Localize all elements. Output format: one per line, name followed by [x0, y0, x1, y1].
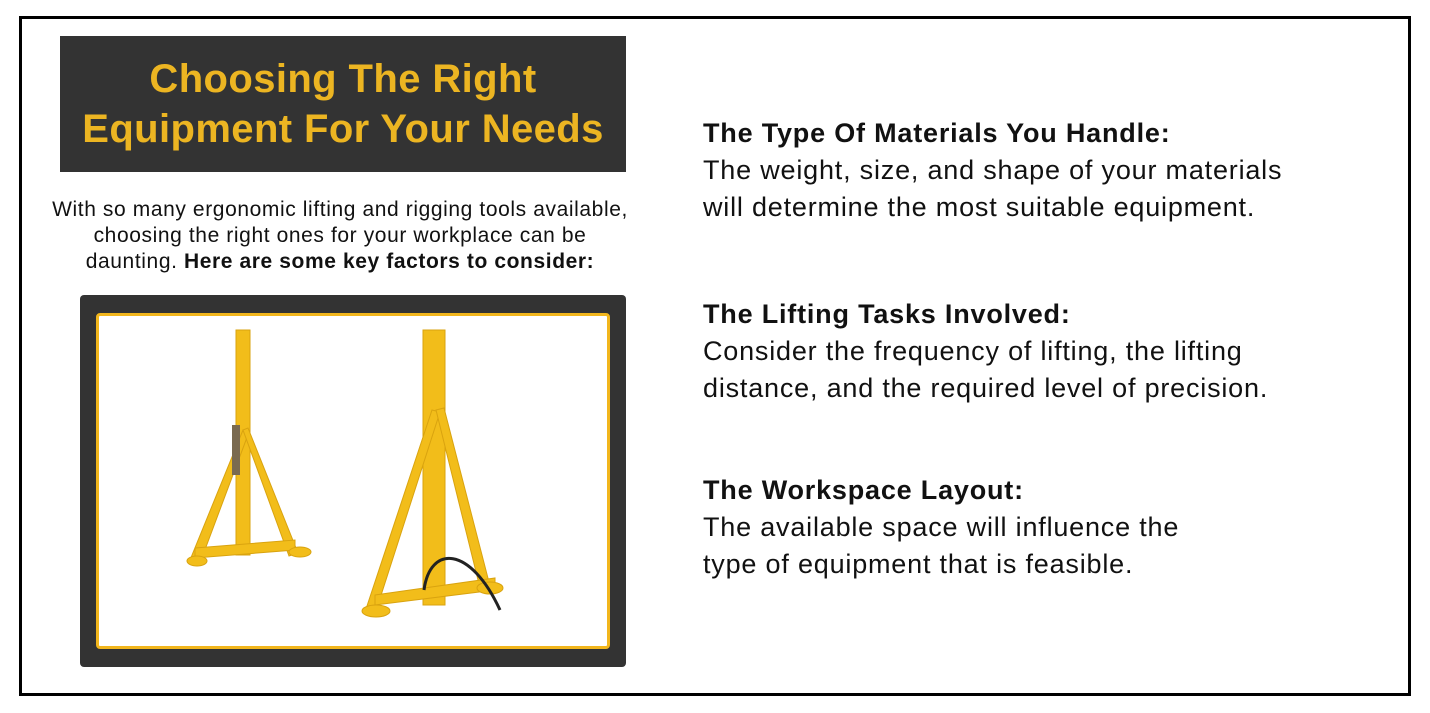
factor: materials — [703, 118, 1282, 222]
factor: lifting tasks: Consider the frequency of lifting, the lifting — [703, 336, 1243, 366]
intro text: choosing the right ones for your workplace can be — [94, 224, 586, 247]
factor: materials: The Type Of Materials You Handle: — [703, 118, 1170, 148]
title: Choosing The Right — [149, 57, 537, 101]
factor: lifting tasks — [703, 299, 1268, 403]
factor: workspace: type of equipment that is feasible. — [703, 549, 1133, 579]
factor: materials: will determine the most suitable equipment. — [703, 192, 1255, 222]
factor: workspace — [703, 475, 1179, 579]
intro text — [52, 198, 628, 273]
factor: workspace: The Workspace Layout: — [703, 475, 1024, 505]
illustration: gantry stands — [186, 330, 504, 618]
photo frame — [96, 313, 610, 649]
intro text: With so many ergonomic lifting and rigging tools available, — [52, 198, 628, 221]
title — [60, 36, 626, 172]
panel: equipment photo — [80, 295, 626, 667]
factor: workspace: The available space will influence the — [703, 512, 1179, 542]
factor: materials: The weight, size, and shape of your materials — [703, 155, 1282, 185]
factor: lifting tasks: The Lifting Tasks Involved: — [703, 299, 1071, 329]
intro text: daunting. Here are some key factors to consider: — [86, 250, 594, 273]
title: Equipment For Your Needs — [82, 107, 604, 151]
factor: lifting tasks: distance, and the required level of precision. — [703, 373, 1268, 403]
